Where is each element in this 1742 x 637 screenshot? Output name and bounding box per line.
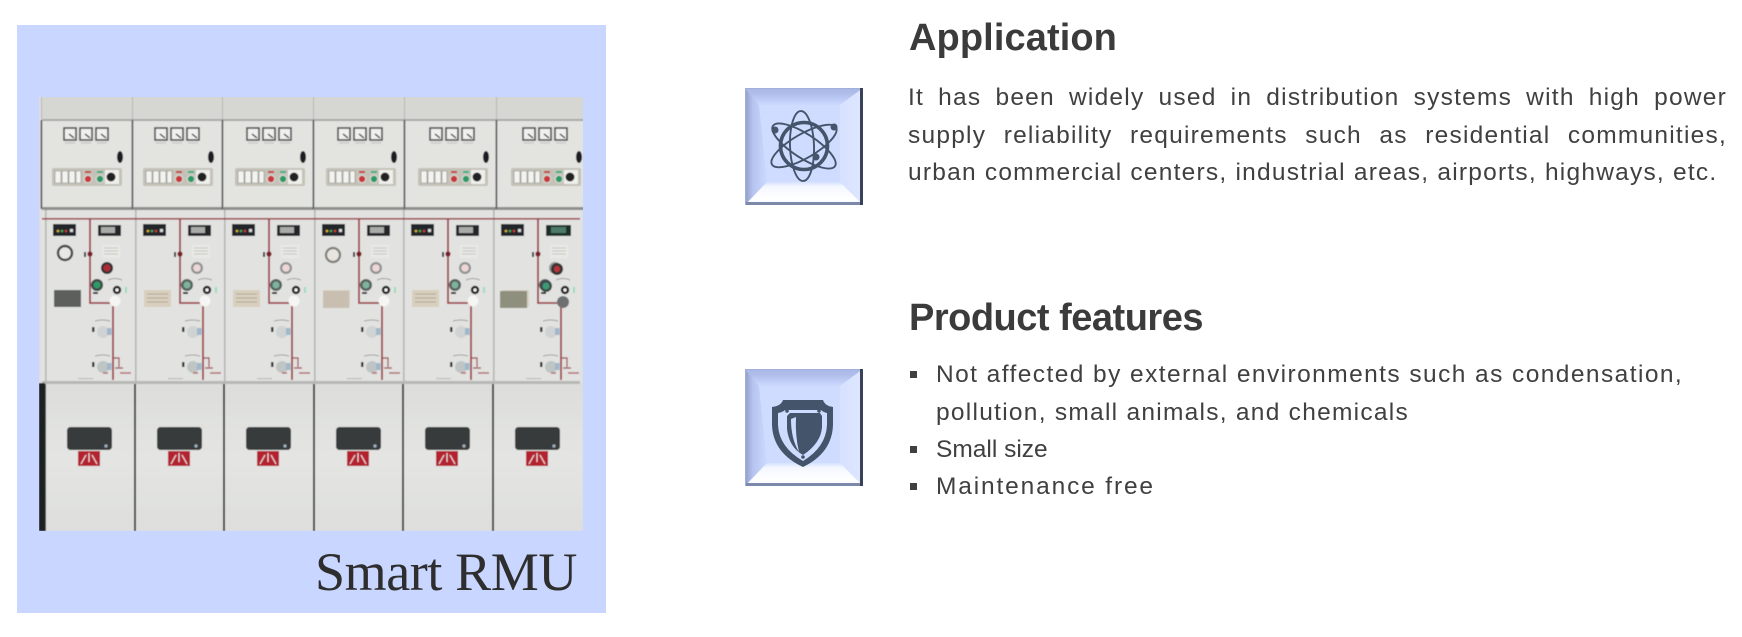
coloured indicators on unit 6 (500, 225, 571, 308)
icon: atom in bevelled tile (745, 88, 863, 205)
panel: product photo card (17, 25, 606, 613)
text block: application description: It has been widely used in distribution systems with high power (908, 84, 1727, 111)
cabinet row: middle switch panels (42, 210, 580, 382)
list: product features: Maintenance free (936, 473, 1155, 500)
coloured indicators on unit 1 (54, 246, 113, 307)
heading: Product features: Product features (909, 297, 1203, 339)
photo caption: Smart RMU (315, 542, 577, 602)
cabinet row: top instrument panels (40, 97, 589, 210)
cabinet row: lower doors (42, 381, 583, 531)
icon: shield in bevelled tile (745, 369, 863, 486)
text block: application description: supply reliability requirements such as residential communities, (908, 122, 1727, 149)
list: product features: Not affected by external environments such as condensation, (936, 361, 1683, 388)
bullet 1 (910, 371, 917, 378)
list: product features (910, 361, 1683, 500)
bullet 3 (910, 483, 917, 490)
heading: Application: Application (909, 17, 1117, 59)
text block: application description (908, 84, 1727, 186)
list: product features: Small size (936, 436, 1048, 463)
list: product features: pollution, small animals, and chemicals (936, 399, 1409, 426)
coloured indicators on unit 4 (323, 248, 349, 308)
text block: application description: urban commercial centers, industrial areas, airports, highways, etc. (908, 159, 1717, 186)
bullet 2 (910, 446, 917, 453)
photo: ring main unit switchgear (39, 97, 589, 531)
background panel (17, 25, 606, 613)
left edge of photo (39, 383, 45, 531)
